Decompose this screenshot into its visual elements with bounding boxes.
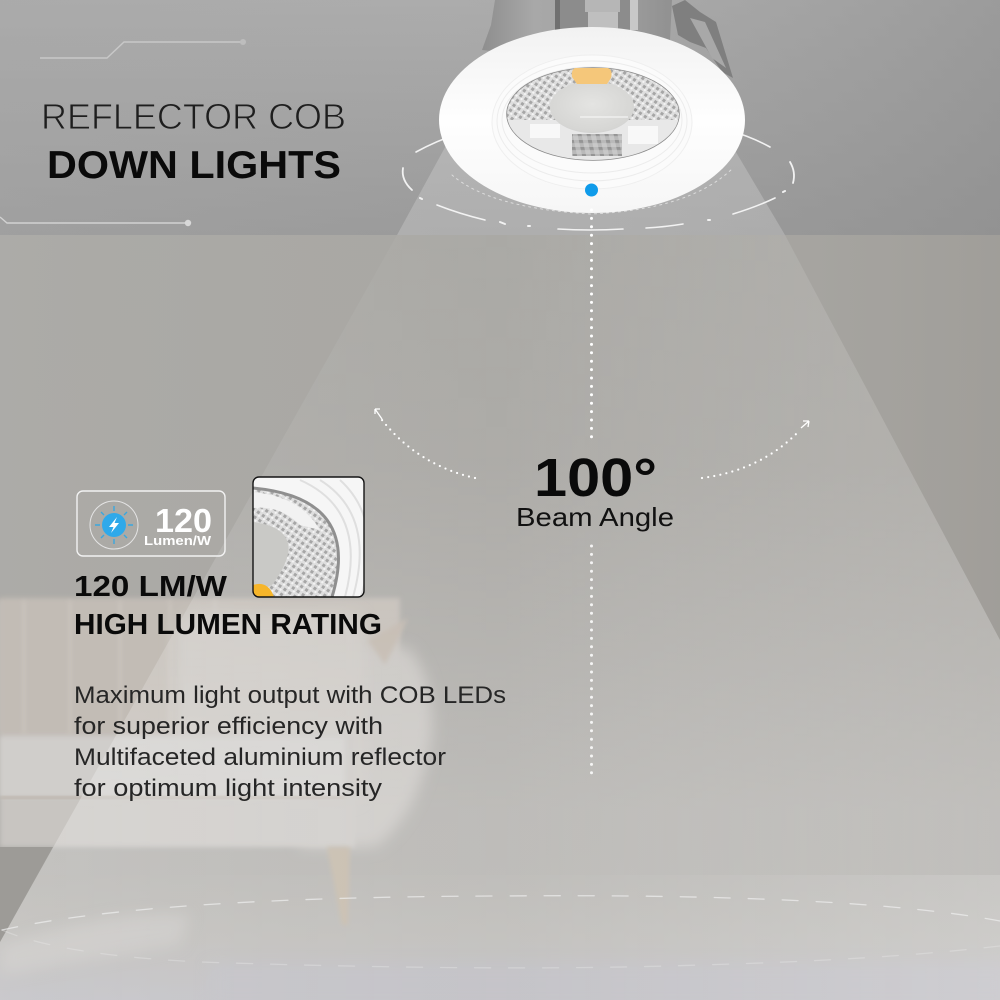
floor — [0, 875, 1000, 1000]
title line 2: DOWN LIGHTS — [47, 144, 341, 187]
beam angle value: 100° — [534, 448, 657, 508]
beam angle label: Beam Angle — [516, 502, 674, 532]
sofa leg — [327, 847, 350, 925]
icon: sun bolt — [95, 506, 133, 544]
centre dotted axis — [590, 210, 593, 775]
lumen badge — [77, 491, 225, 556]
beam angle arc: right — [702, 421, 809, 478]
beam angle arc: left — [375, 409, 475, 478]
floor light reflection — [0, 914, 1000, 1000]
feature description: for optimum light intensity — [74, 775, 382, 802]
feature description: Maximum light output with COB LEDs — [74, 682, 506, 709]
COB chip — [572, 68, 612, 84]
top band — [0, 0, 1000, 235]
floor dashed light ring — [2, 896, 1000, 968]
feature description: Multifaceted aluminium reflector — [74, 744, 446, 771]
feature description: for superior efficiency with — [74, 713, 383, 740]
reflector close-up thumbnail — [253, 477, 369, 597]
sofa — [0, 598, 432, 847]
badge unit: Lumen/W — [144, 533, 212, 548]
room background — [0, 235, 1000, 1000]
feature description — [74, 682, 506, 802]
heading line 1: 120 LM/W — [74, 571, 228, 603]
title line 1: REFLECTOR COB — [41, 96, 346, 137]
heading line 2: HIGH LUMEN RATING — [74, 609, 382, 641]
lamp reflector — [505, 66, 681, 162]
dashed ring around lamp — [403, 130, 794, 230]
decorative circuit line: top — [40, 42, 244, 58]
lamp ring — [439, 27, 745, 213]
decorative circuit dot: bottom — [185, 220, 191, 226]
decorative circuit dot: top — [240, 39, 246, 45]
feature heading — [74, 571, 382, 641]
badge number: 120 — [155, 502, 212, 539]
blue indicator dot — [585, 184, 598, 196]
title — [41, 96, 346, 187]
dark floor outside beam — [0, 847, 53, 942]
decorative circuit line: bottom — [0, 217, 188, 223]
lamp housing — [482, 0, 733, 78]
spring clip — [672, 0, 733, 78]
